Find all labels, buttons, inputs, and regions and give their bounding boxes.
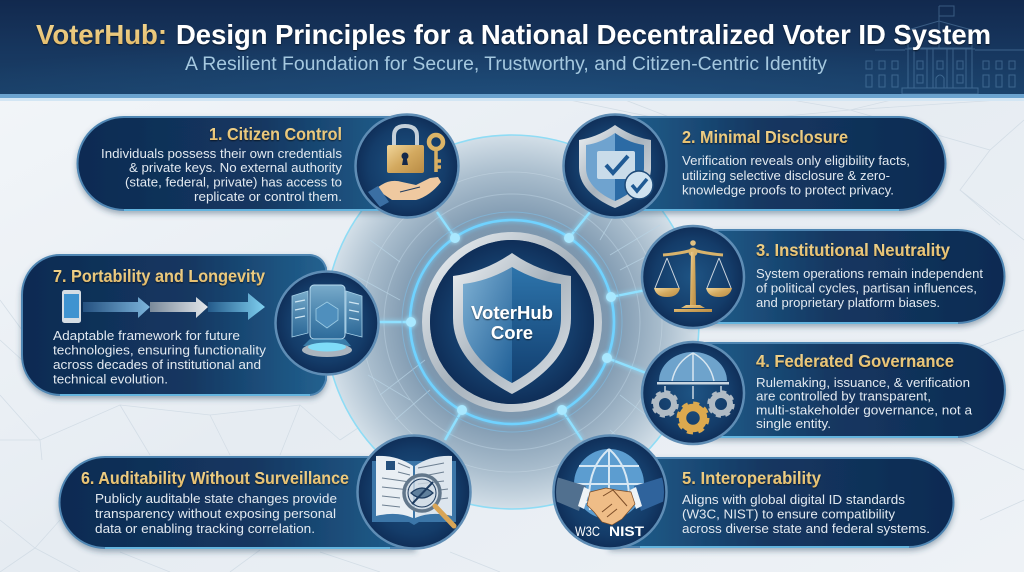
body text: single entity. (756, 416, 831, 431)
heading: 7. Portability and Longevity (53, 266, 265, 286)
icon: globe, handshake, W3C and NIST: NIST (609, 523, 644, 539)
body text: knowledge proofs to protect privacy. (682, 182, 894, 198)
icon: dome and gears (642, 342, 744, 444)
body text: (state, federal, private) has access to (125, 174, 342, 190)
heading: 1. Citizen Control (209, 124, 342, 144)
body text: Verification reveals only eligibility facts, (682, 153, 910, 168)
arrows (83, 293, 265, 320)
outer ring (402, 212, 622, 432)
heading: 5. Interoperability (682, 468, 821, 488)
shield: VoterHub Core (453, 253, 571, 394)
icon: globe, handshake, W3C and NIST (553, 436, 667, 548)
body text: multi-stakeholder governance, not a (756, 402, 973, 418)
body text (682, 153, 910, 198)
body text: Aligns with global digital ID standards (682, 492, 905, 507)
subtitle: A Resilient Foundation for Secure, Trustworthy, and Citizen-Centric Identity (185, 54, 827, 75)
body text: across diverse state and federal systems. (682, 521, 930, 536)
panel 1: Citizen Control (78, 114, 458, 218)
title: Design Principles for a National Decentralized Voter ID System (176, 19, 991, 50)
body text (756, 375, 973, 431)
icon: open book with magnifier (358, 436, 470, 548)
icon: shield with check (564, 114, 666, 218)
body text (756, 266, 983, 310)
connector nodes (406, 233, 616, 415)
body text: & private keys. No external authority (129, 160, 342, 175)
body text: of political cycles, partisan influences, (756, 280, 977, 296)
panel 4: Federated Governance (642, 342, 1005, 444)
heading: 6. Auditability Without Surveillance (81, 468, 349, 488)
icon: lock, key and hand (356, 114, 458, 218)
icon: balance scales (642, 226, 744, 328)
body text: Publicly auditable state changes provide (95, 491, 337, 506)
body text: are controlled by transparent, (756, 388, 931, 404)
icon: holographic phone (276, 272, 378, 374)
body text: technologies, ensuring functionality (53, 342, 266, 358)
body text: across decades of institutional and (53, 357, 261, 372)
body text: Rulemaking, issuance, & verification (756, 375, 970, 390)
body text: System operations remain independent (756, 266, 983, 281)
hub disc (426, 236, 598, 408)
panel 3: Institutional Neutrality (642, 226, 1004, 328)
body text: Adaptable framework for future (53, 328, 240, 343)
heading: 3. Institutional Neutrality (756, 240, 950, 260)
body text (101, 146, 342, 204)
central hub network (325, 135, 699, 509)
title: VoterHub: (36, 19, 167, 50)
body text: and proprietary platform biases. (756, 295, 940, 310)
shield: VoterHub Core: VoterHub (471, 302, 553, 323)
body text (53, 328, 266, 386)
body text: (W3C, NIST) to ensure compatibility (682, 506, 895, 522)
body text: Individuals possess their own credentials (101, 146, 342, 161)
body text (682, 492, 930, 536)
panel 5: Interoperability (553, 436, 954, 548)
panel 2: Minimal Disclosure (564, 114, 946, 218)
connectors (378, 212, 646, 440)
body text: technical evolution. (53, 372, 168, 386)
header banner (0, 0, 1024, 101)
body text: replicate or control them. (194, 189, 342, 204)
panel 7: Portability and Longevity (22, 255, 378, 395)
halo disc (325, 135, 699, 509)
icon: phone (62, 290, 81, 323)
panel 6: Auditability Without Surveillance (60, 436, 470, 548)
shield: VoterHub Core: Core (491, 322, 533, 343)
icon: globe, handshake, W3C and NIST: W3C (575, 523, 600, 539)
icon: capitol building watermark (866, 6, 1024, 94)
body text: data or enabling tracking correlation. (95, 521, 315, 536)
body text (95, 491, 337, 536)
heading: 4. Federated Governance (756, 351, 954, 371)
body text: transparency without exposing personal (95, 506, 336, 521)
body text: utilizing selective disclosure & zero- (682, 168, 890, 183)
heading: 2. Minimal Disclosure (682, 127, 848, 147)
